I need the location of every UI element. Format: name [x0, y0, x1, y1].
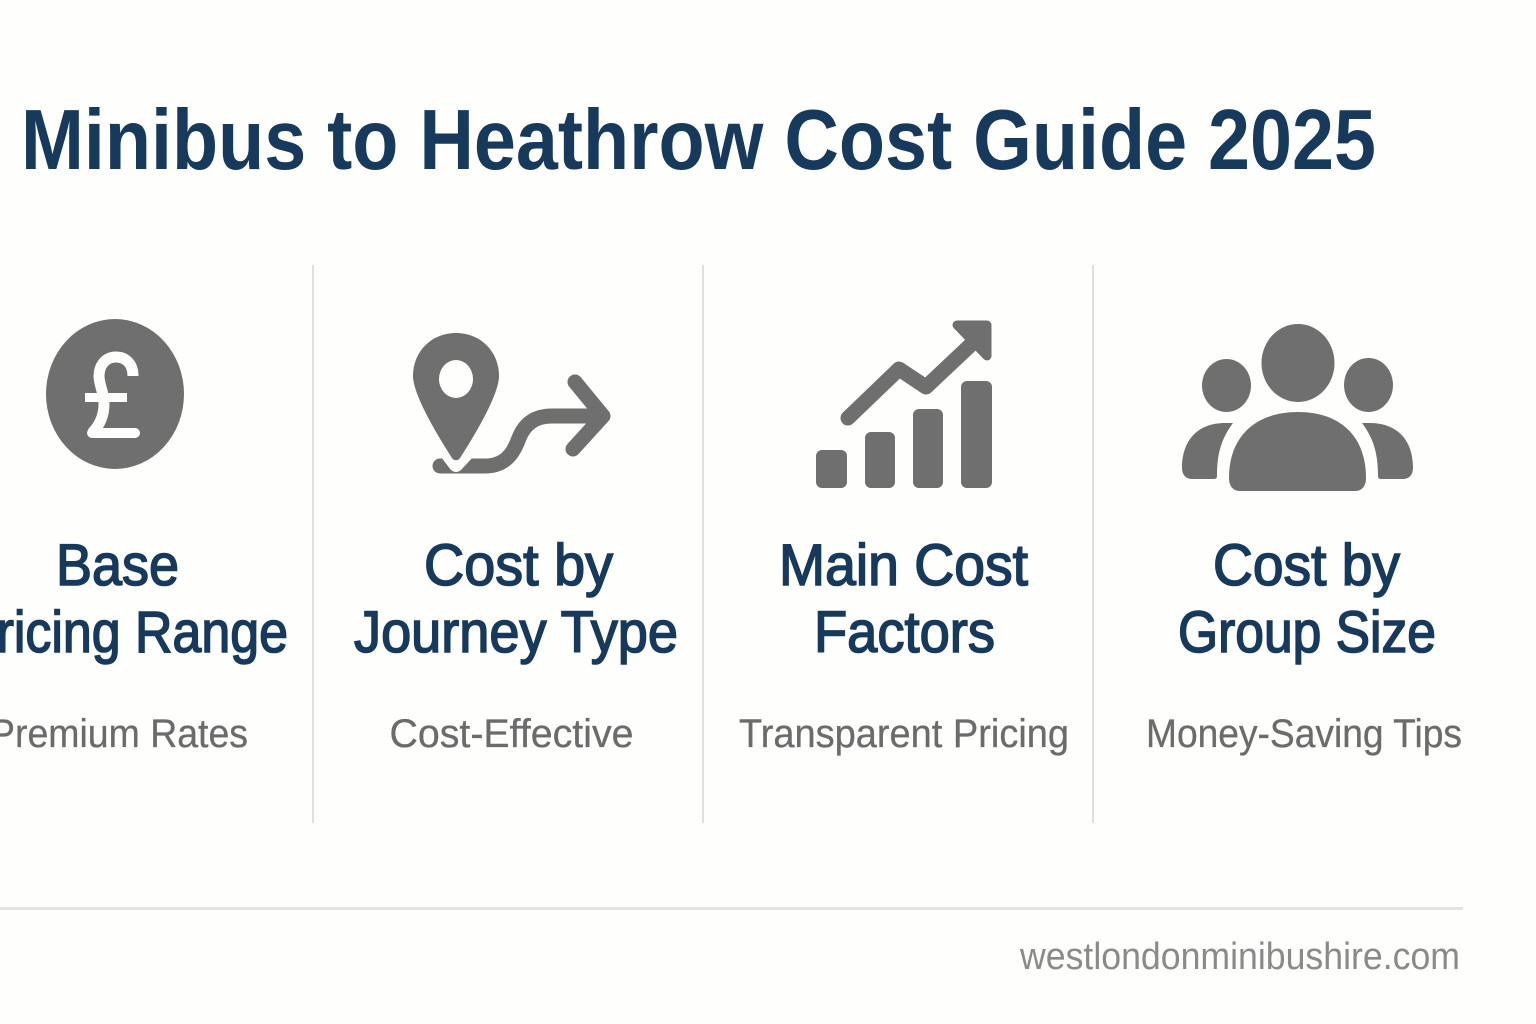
heading: cost by journey type [354, 533, 678, 665]
heading: cost by group size: Cost by [1213, 533, 1400, 598]
text: website: westlondonminibushire.com [1019, 936, 1460, 978]
icon: group of people [1182, 324, 1413, 491]
icon: pound coin [46, 319, 184, 469]
heading: cost by journey type: Cost by [424, 533, 613, 598]
heading: base pricing range: Base [56, 533, 179, 598]
heading: cost by group size: Group Size [1178, 600, 1436, 665]
icon: location pin with route arrow [413, 333, 603, 472]
text: cost-effective: Cost-Effective [390, 712, 634, 756]
text: money-saving tips: Money-Saving Tips [1146, 712, 1462, 756]
title: Minibus to Heathrow Cost Guide 2025 [21, 93, 1376, 188]
heading: cost by journey type: Journey Type [354, 600, 678, 665]
heading: cost by group size [1178, 533, 1436, 665]
heading: base pricing range [0, 533, 288, 665]
heading: main cost factors [779, 533, 1028, 665]
heading: main cost factors: Factors [814, 600, 995, 665]
heading: main cost factors: Main Cost [779, 533, 1028, 598]
text: transparent pricing: Transparent Pricing [739, 712, 1069, 756]
icon: rising bar chart [816, 325, 992, 488]
